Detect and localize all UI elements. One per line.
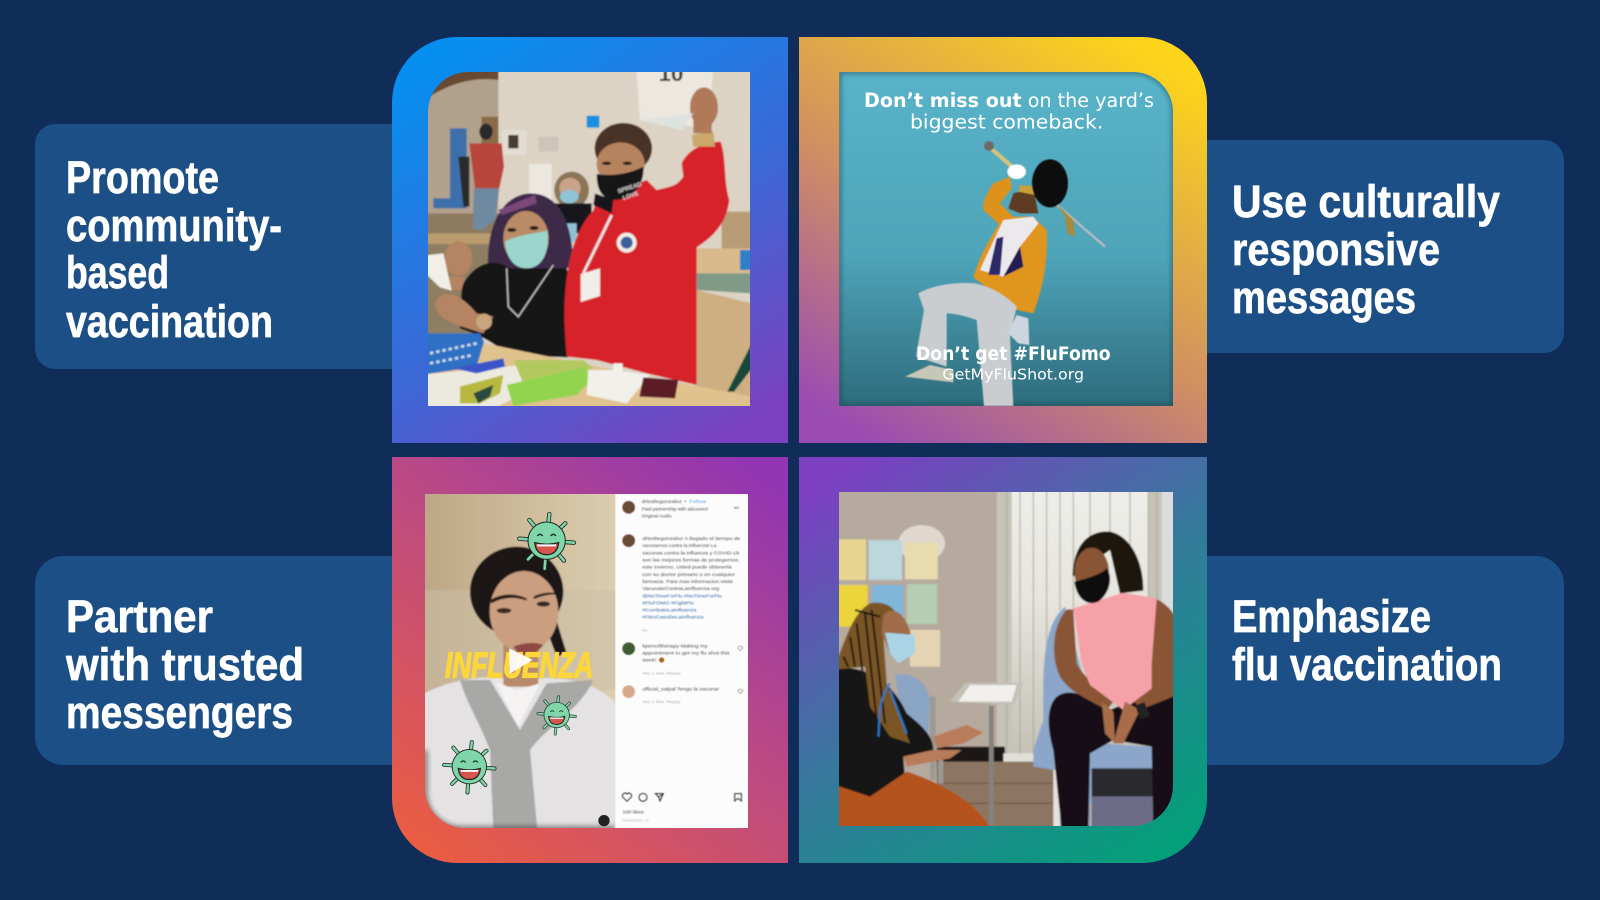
post sidebar: son las mejores formas de protegernos bbox=[642, 558, 739, 564]
post sidebar: appointment to get my flu shot this bbox=[642, 651, 730, 657]
INFLUENZA title: INFLUENZA bbox=[445, 644, 593, 685]
post sidebar: • bbox=[684, 500, 686, 505]
photo: two masked community vaccination workers: 10 bbox=[659, 63, 683, 86]
post sidebar: week! bbox=[642, 658, 656, 664]
post sidebar: Follow bbox=[689, 499, 707, 505]
label panel: partner with trusted messengers: with trusted bbox=[65, 639, 304, 690]
label panel: use culturally responsive messages: Use culturally bbox=[1232, 176, 1500, 227]
photo: drum major flu campaign ad: GetMyFluShot.org bbox=[942, 367, 1084, 384]
post sidebar: 4w 1 like Reply bbox=[642, 700, 681, 704]
label panel: partner with trusted messengers: Partner bbox=[66, 591, 213, 642]
post sidebar: farmacia. Para mas informacion visite bbox=[642, 579, 733, 585]
photo: drum major flu campaign ad bbox=[839, 72, 1173, 406]
photo: two masked community vaccination workers: LOVE bbox=[622, 191, 639, 202]
label panel: emphasize flu vaccination bbox=[1207, 556, 1564, 765]
label panel: use culturally responsive messages: messages bbox=[1232, 272, 1416, 323]
post sidebar: Original Audio bbox=[642, 513, 672, 519]
panel: yellow-pink gradient frame bbox=[799, 37, 1207, 443]
post sidebar: kperezltherapy Making my bbox=[642, 643, 708, 649]
label panel: partner with trusted messengers bbox=[35, 556, 392, 765]
label panel: use culturally responsive messages: responsive bbox=[1232, 224, 1440, 275]
post sidebar: VacunateContraLaInfluenza.org bbox=[642, 586, 719, 592]
photo: clinician talking with a patient bbox=[830, 485, 1177, 832]
ad headline: Don’t miss out on the yard’s bbox=[864, 89, 1154, 112]
panel: blue-purple gradient frame bbox=[392, 37, 788, 443]
photo: two masked community vaccination workers: SPREAD bbox=[617, 182, 643, 195]
label panel: promote community-based vaccination: based bbox=[66, 247, 169, 298]
label panel: emphasize flu vaccination: flu vaccination bbox=[1232, 639, 1502, 690]
illustration: drum major figure bbox=[905, 141, 1105, 406]
post sidebar: November 11 bbox=[622, 819, 649, 823]
photo: two masked community vaccination workers bbox=[420, 63, 757, 410]
panel: purple-orange gradient frame bbox=[392, 457, 788, 863]
label panel: promote community-based vaccination: Promote bbox=[66, 152, 219, 203]
post sidebar: #FluFOMO #FightFlu bbox=[642, 600, 694, 606]
post sidebar: 100 likes bbox=[622, 809, 644, 815]
label panel: use culturally responsive messages bbox=[1207, 140, 1564, 353]
video still bbox=[420, 492, 617, 832]
label panel: promote community-based vaccination: vaccination bbox=[66, 296, 273, 347]
screenshot: social media post by trusted messenger bbox=[420, 492, 750, 832]
post sidebar: official_valpal Tengo la vacuna! bbox=[642, 686, 719, 692]
virus stickers bbox=[444, 514, 575, 792]
label panel: promote community-based vaccination bbox=[35, 124, 392, 369]
play icon bbox=[509, 648, 533, 674]
post sidebar: 4w 1 like Reply bbox=[642, 671, 681, 675]
post sidebar: drlesliegonzalez A llegado el tiempo de bbox=[642, 536, 741, 542]
post sidebar: vacunarnos contra la influenza! La bbox=[642, 543, 717, 549]
post sidebar: ••• bbox=[734, 506, 739, 511]
post sidebar: @NoTimeForFlu #NoTimeForFlu bbox=[642, 593, 722, 599]
post sidebar: Paid partnership with adcouncil bbox=[642, 507, 708, 513]
post sidebar: con su doctor primario o en cualquier bbox=[642, 572, 735, 578]
post sidebar: vacunas contra la influenza y COVID-19 bbox=[642, 550, 739, 556]
label panel: promote community-based vaccination: community- bbox=[66, 200, 282, 251]
label panel: partner with trusted messengers: messengers bbox=[66, 687, 293, 738]
post sidebar: este invierno. Usted puede obtenerla bbox=[642, 565, 732, 571]
panel: purple-green gradient frame bbox=[799, 457, 1207, 863]
post sidebar bbox=[615, 492, 750, 832]
ad call to action: Don’t get #FluFomo bbox=[916, 344, 1111, 365]
post sidebar: #CombateLaInfluenza bbox=[642, 608, 697, 614]
post sidebar: 4w bbox=[642, 629, 647, 633]
post sidebar: #OtroCasoDeLaInfluenza bbox=[642, 615, 704, 621]
post sidebar: drlesliegonzalez bbox=[642, 499, 682, 505]
photo: drum major flu campaign ad: biggest comeback. bbox=[910, 110, 1103, 133]
label panel: emphasize flu vaccination: Emphasize bbox=[1232, 591, 1431, 642]
